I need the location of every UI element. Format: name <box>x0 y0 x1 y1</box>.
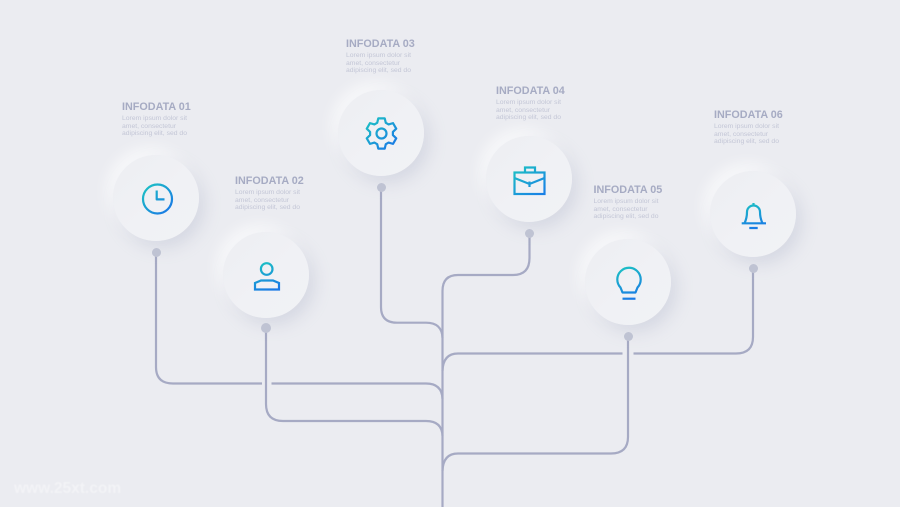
icon: clock <box>142 183 174 215</box>
heading and text: infodata 01: INFODATA 01 <box>122 101 191 113</box>
heading and text: infodata 03 <box>346 38 415 74</box>
panel: infodata 06 <box>708 109 804 273</box>
icon: person <box>254 262 280 291</box>
panel: infodata 01 <box>112 101 207 257</box>
heading and text: infodata 02 <box>235 175 304 211</box>
heading and text: infodata 02: amet, consectetur <box>235 197 289 204</box>
circle: infodata 03 <box>338 90 424 176</box>
node dot: infodata 01 <box>152 248 160 256</box>
heading and text: infodata 05 <box>594 184 662 220</box>
heading and text: infodata 05: INFODATA 05 <box>594 184 662 196</box>
node dot: infodata 04 <box>524 228 534 238</box>
node dot: infodata 03 <box>376 182 386 192</box>
heading and text: infodata 04: adipiscing elit, sed do <box>496 114 561 121</box>
watermark: www.25xt.com <box>14 480 121 497</box>
heading and text: infodata 01: Lorem ipsum dolor sit <box>122 115 187 122</box>
circle: infodata 06 <box>710 171 796 257</box>
panel: infodata 02 <box>222 175 317 333</box>
heading and text: infodata 05: adipiscing elit, sed do <box>594 213 658 220</box>
heading and text: infodata 01: adipiscing elit, sed do <box>122 130 187 137</box>
connector: trunk and infodata 04 <box>442 233 530 507</box>
icon: briefcase <box>513 166 546 196</box>
connector: infodata 02 <box>266 328 442 436</box>
icon: light bulb <box>616 266 642 300</box>
heading and text: infodata 06 <box>714 109 783 145</box>
heading and text: infodata 04: amet, consectetur <box>496 107 550 114</box>
heading and text: infodata 03: amet, consectetur <box>346 60 400 67</box>
heading and text: infodata 04: INFODATA 04 <box>496 85 565 97</box>
panel: infodata 05 <box>584 184 679 341</box>
heading and text: infodata 05: Lorem ipsum dolor sit <box>594 198 658 205</box>
icon: gear <box>366 117 398 150</box>
heading and text: infodata 02: adipiscing elit, sed do <box>235 204 300 211</box>
circle: infodata 04 <box>486 136 572 222</box>
heading and text: infodata 05: amet, consectetur <box>594 206 648 213</box>
heading and text: infodata 03: INFODATA 03 <box>346 38 415 50</box>
heading and text: infodata 01 <box>122 101 191 137</box>
heading and text: infodata 03: Lorem ipsum dolor sit <box>346 52 411 59</box>
connector: infodata 05 <box>442 336 628 471</box>
heading and text: infodata 04: Lorem ipsum dolor sit <box>496 99 561 106</box>
heading and text: infodata 03: adipiscing elit, sed do <box>346 67 411 74</box>
node dot: infodata 02 <box>261 323 271 333</box>
node dot: infodata 05 <box>624 332 632 340</box>
heading and text: infodata 01: amet, consectetur <box>122 123 176 130</box>
connector: infodata 06 <box>442 268 753 371</box>
heading and text: infodata 06: INFODATA 06 <box>714 109 783 121</box>
connector: infodata 01 <box>156 252 442 399</box>
heading and text: infodata 04 <box>496 85 565 121</box>
circle: infodata 05 <box>585 239 671 325</box>
icon: bell <box>742 203 766 230</box>
heading and text: infodata 06: Lorem ipsum dolor sit <box>714 123 779 130</box>
heading and text: infodata 02: Lorem ipsum dolor sit <box>235 189 300 196</box>
panel: infodata 03 <box>336 38 432 192</box>
panel: infodata 04 <box>484 85 580 238</box>
connector: infodata 03 <box>381 187 442 338</box>
heading and text: infodata 06: adipiscing elit, sed do <box>714 138 779 145</box>
heading and text: infodata 06: amet, consectetur <box>714 131 768 138</box>
circle: infodata 01 <box>113 155 199 241</box>
heading and text: infodata 02: INFODATA 02 <box>235 175 304 187</box>
node dot: infodata 06 <box>748 264 758 272</box>
circle: infodata 02 <box>223 232 309 318</box>
